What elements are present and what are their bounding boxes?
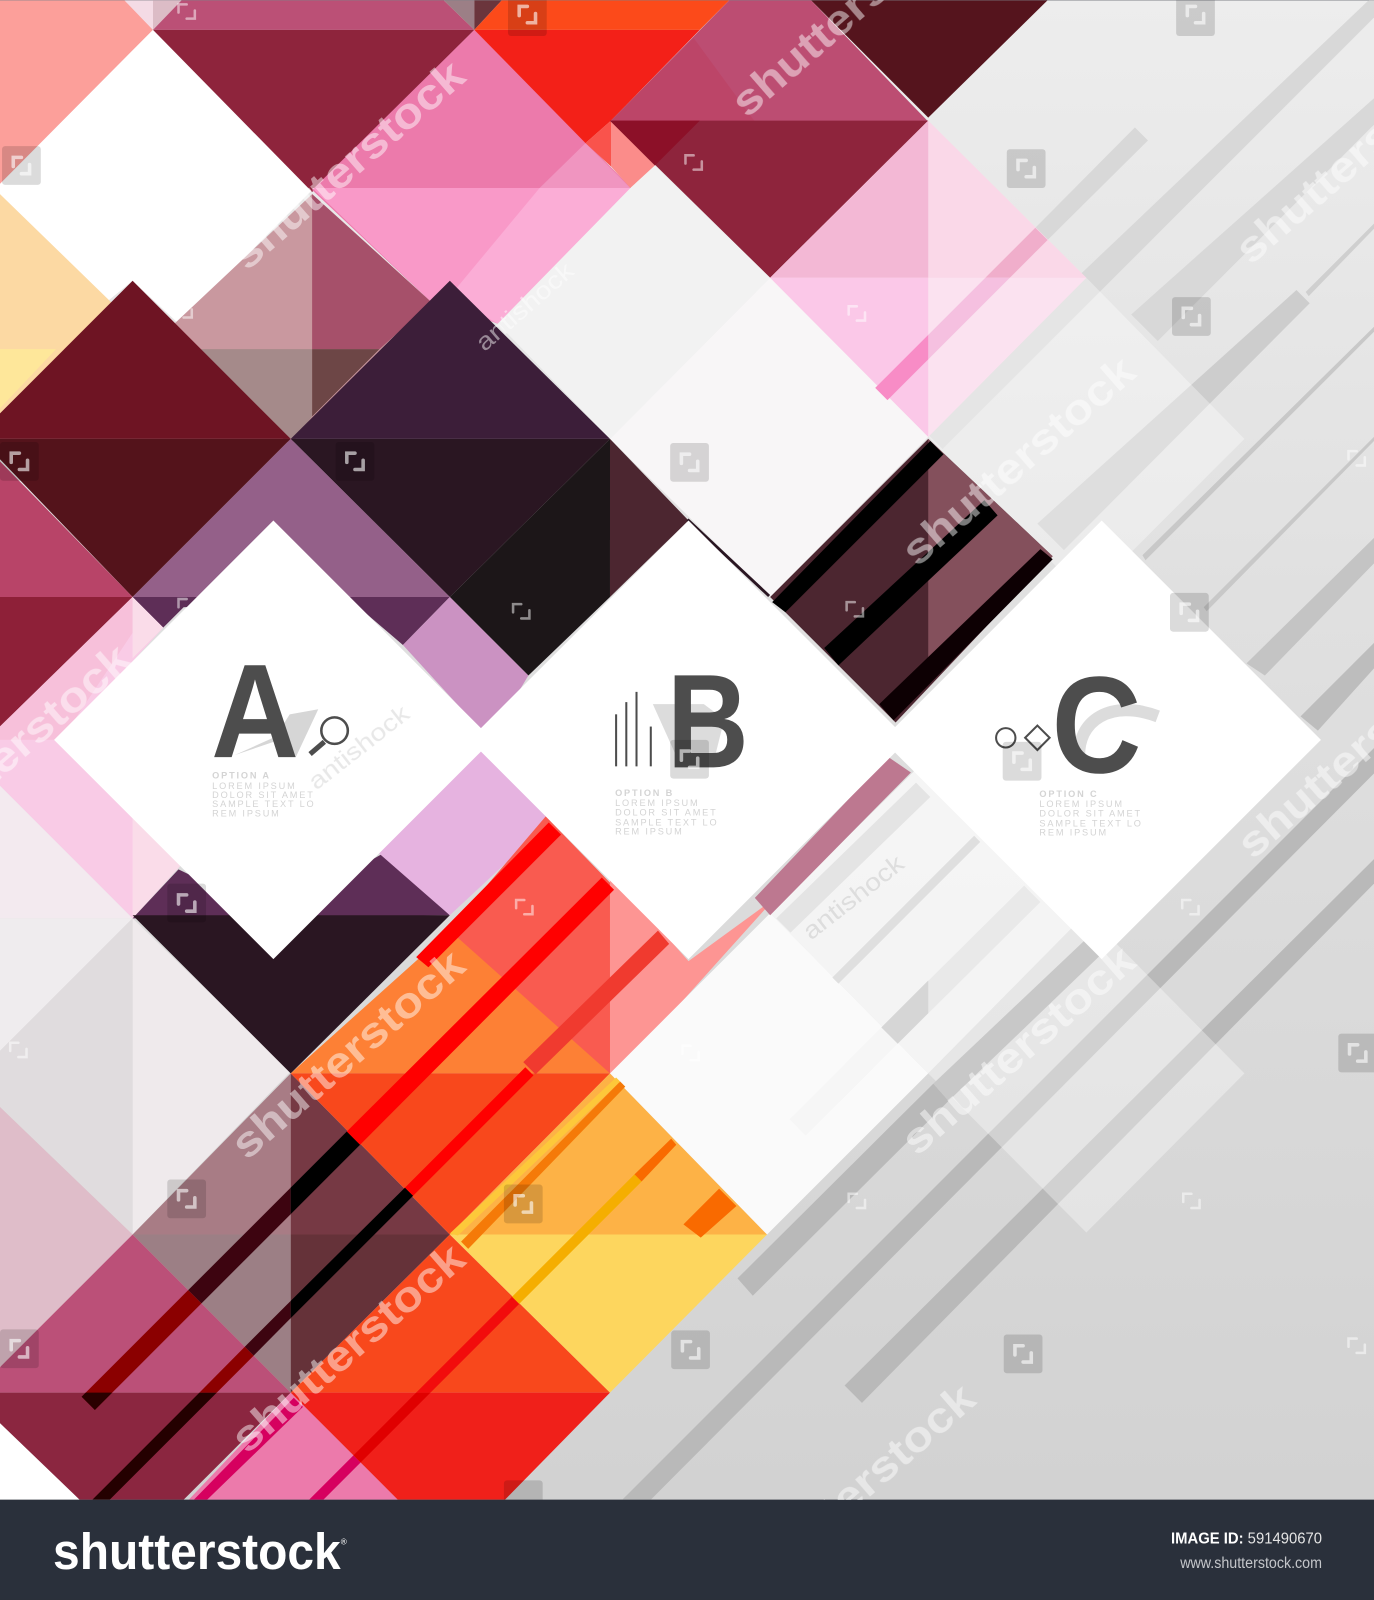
text: option C: REM IPSUM (1039, 828, 1108, 838)
text: option A: OPTION A (212, 771, 271, 781)
text: option C: OPTION C (1039, 789, 1098, 799)
website: www.shutterstock.com (1179, 1555, 1322, 1572)
text: option A: REM IPSUM (212, 808, 281, 818)
text: option B: DOLOR SIT AMET (615, 807, 718, 817)
pink lower (189, 1393, 398, 1500)
diagonal colour stripes (82, 822, 736, 1500)
option C (996, 648, 1158, 838)
watermark text: antishock (471, 257, 580, 357)
watermark text: shutterstock (892, 347, 1145, 575)
text: option A: SAMPLE TEXT LO (212, 799, 316, 809)
rose diamond top (610, 0, 928, 122)
lower right grey stripes (622, 748, 1374, 1500)
text: option A: DOLOR SIT AMET (212, 790, 315, 800)
white diamond top left (0, 30, 312, 324)
light pink diamond (770, 121, 1086, 437)
watermark text: shutterstock (732, 1374, 985, 1600)
ghost C (1079, 710, 1158, 760)
letter A: A (211, 637, 299, 786)
icon: bars (616, 692, 651, 766)
letter B: B (667, 647, 749, 796)
yellow left (0, 194, 112, 419)
text: option C: LOREM IPSUM (1039, 799, 1124, 809)
lower left pale (0, 786, 291, 1235)
dark striped diamond (770, 439, 1053, 722)
image id: IMAGE ID: 591490670 (1171, 1531, 1322, 1548)
text: option C: DOLOR SIT AMET (1039, 808, 1142, 818)
text: option C (1039, 789, 1143, 838)
watermark text: shutterstock (892, 936, 1145, 1165)
light purple (403, 597, 528, 740)
watermark text: shutterstock (222, 940, 474, 1169)
left crimson (0, 461, 133, 597)
dark corner top (811, 0, 1048, 118)
pale pink overlay (540, 143, 630, 188)
text: option B: LOREM IPSUM (615, 798, 700, 808)
text: option B (615, 788, 718, 837)
pale lower diamonds (610, 913, 928, 1235)
top band (153, 0, 474, 30)
dark chevron (133, 852, 450, 918)
hairline (686, 518, 770, 597)
crimson lower (0, 1235, 291, 1393)
crimson triangle top (153, 30, 474, 192)
watermark text: antishock (798, 850, 910, 945)
pale inner bands (737, 783, 1102, 1296)
mauve diamond (173, 194, 431, 444)
ghost B (653, 704, 724, 767)
registered mark: ® (341, 1538, 347, 1547)
salmon notch (586, 121, 611, 167)
option B (615, 647, 749, 837)
watermark text: antishock (303, 700, 415, 796)
orange diamond (291, 931, 610, 1073)
text: option C: SAMPLE TEXT LO (1039, 819, 1143, 829)
footer logo: shutterstock (53, 1523, 341, 1580)
mauve stripe (755, 757, 911, 915)
text: option B: OPTION B (615, 788, 674, 798)
white diamond C (882, 521, 1321, 959)
lilac square (377, 745, 556, 915)
white corner (0, 1423, 80, 1500)
yellow diamond (450, 1073, 767, 1235)
watermark text: shutterstock (222, 1234, 474, 1462)
top left pale triangle (124, 0, 182, 30)
pale diamonds (498, 166, 770, 439)
letter C: C (1052, 648, 1141, 802)
text: option A (212, 771, 316, 818)
white diamond A (54, 521, 493, 959)
icon: circle and diamond (996, 726, 1050, 750)
text: option A: LOREM IPSUM (212, 781, 297, 791)
footer bar (0, 1500, 1374, 1600)
text: option B: SAMPLE TEXT LO (615, 818, 718, 828)
text: option B: REM IPSUM (615, 827, 684, 837)
ghost A (235, 709, 318, 757)
icon: magnifier (310, 717, 348, 754)
brown diamond (133, 1073, 450, 1393)
white diamond B (469, 521, 908, 959)
left pink (0, 597, 184, 918)
red top (474, 0, 729, 30)
dark purple diamond (291, 281, 610, 439)
option A (211, 637, 348, 818)
purple diamond (133, 439, 450, 597)
pink diamond (312, 30, 632, 324)
maroon diamond (0, 281, 291, 439)
pink triangle lower left (0, 1107, 133, 1367)
red diamond (291, 1235, 610, 1393)
salmon panels (458, 816, 610, 1074)
crimson diamond (610, 121, 928, 278)
top left salmon (0, 0, 153, 184)
upper right grey stripes (920, 0, 1374, 731)
watermark text: shutterstock (222, 51, 474, 279)
